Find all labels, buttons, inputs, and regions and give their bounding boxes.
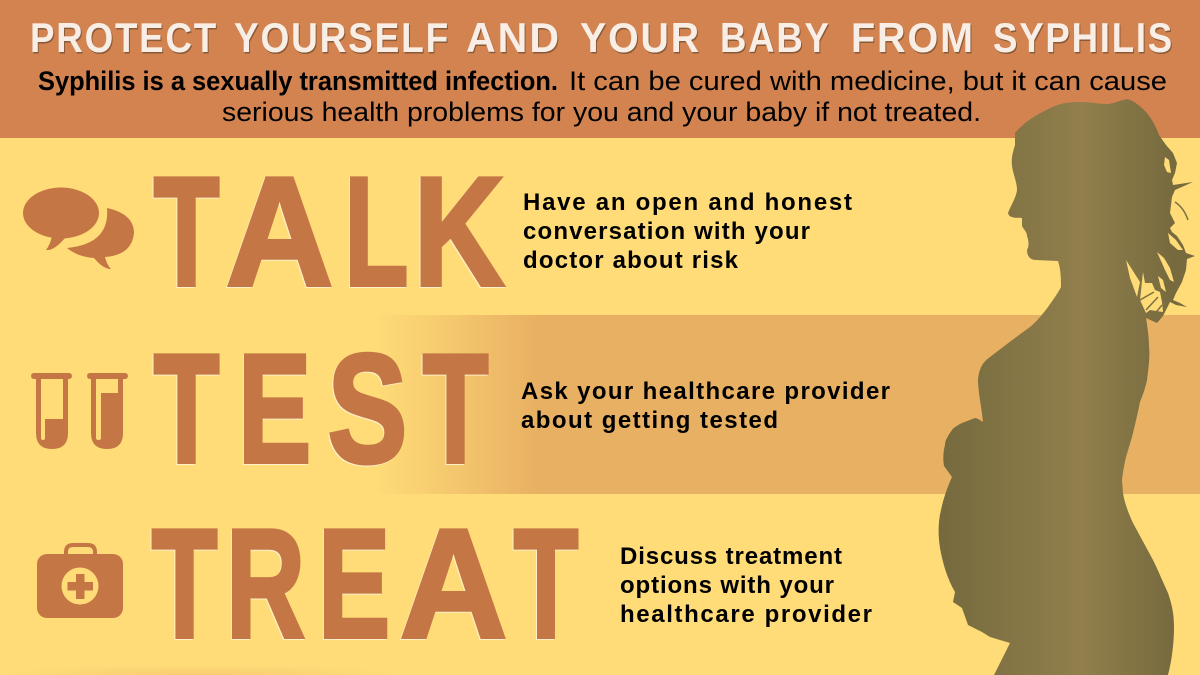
- heading: TREAT: T: [513, 498, 577, 671]
- TREAT row: [37, 497, 872, 671]
- title: YOURSELF: [235, 16, 451, 62]
- description: talk: conversation with your: [523, 218, 810, 245]
- heading: TREAT: E: [317, 498, 389, 671]
- TALK row: [23, 145, 852, 319]
- title: PROTECT: [30, 14, 218, 61]
- bottom edge shading: [0, 655, 400, 675]
- heading: TREAT: A: [400, 497, 507, 670]
- title: YOURSELF: [234, 14, 450, 61]
- heading: TREAT: T: [514, 497, 578, 670]
- heading: TEST: E: [237, 323, 310, 496]
- TEST row: [31, 322, 890, 496]
- icon: speech bubbles: [23, 188, 134, 269]
- description: treat: [620, 543, 872, 628]
- title: YOUR: [580, 14, 701, 61]
- heading: TEST: T: [423, 322, 488, 495]
- heading: TREAT: A: [399, 498, 506, 671]
- heading: TALK: T: [154, 145, 219, 318]
- intro text: serious health problems for you and your baby if not treated.: [222, 97, 981, 127]
- heading: TREAT: T: [152, 497, 217, 670]
- heading: TALK: A: [225, 146, 332, 319]
- heading: TEST: E: [238, 322, 311, 495]
- title: BABY: [721, 16, 831, 62]
- description: treat: Discuss treatment: [620, 543, 842, 570]
- title: BABY: [720, 14, 830, 61]
- heading: TEST: T: [153, 323, 218, 496]
- heading: TEST: T: [154, 322, 219, 495]
- heading: TREAT: R: [226, 497, 305, 670]
- heading: TALK: L: [344, 145, 408, 318]
- title: FROM: [852, 16, 976, 62]
- description: talk: Have an open and honest: [523, 189, 852, 216]
- icon: medical kit: [37, 545, 123, 618]
- icon: test tubes: [31, 373, 128, 449]
- title: SYPHILIS: [994, 16, 1175, 62]
- description: treat: options with your: [620, 572, 834, 599]
- description: test: about getting tested: [521, 407, 778, 434]
- description: talk: [523, 189, 852, 274]
- heading: TREAT: [151, 497, 578, 671]
- title: FROM: [851, 14, 975, 61]
- heading: TALK: K: [414, 145, 504, 318]
- description: test: Ask your healthcare provider: [521, 378, 890, 405]
- test band: [375, 315, 1200, 494]
- heading: TALK: L: [343, 146, 407, 319]
- heading: TREAT: E: [318, 497, 390, 670]
- heading: TALK: A: [226, 145, 333, 318]
- description: test: [521, 378, 890, 434]
- heading: TALK: T: [153, 146, 218, 319]
- heading: TREAT: T: [151, 498, 216, 671]
- heading: TEST: [153, 322, 488, 496]
- title: [30, 14, 1175, 62]
- heading: TEST: T: [422, 323, 487, 496]
- title: PROTECT: [31, 16, 219, 62]
- description: talk: doctor about risk: [523, 247, 739, 274]
- intro text: Syphilis is a sexually transmitted infection.: [38, 66, 558, 96]
- description: treat: healthcare provider: [620, 601, 872, 628]
- intro text: [38, 66, 1167, 127]
- heading: TALK: [153, 145, 504, 319]
- title: AND: [466, 14, 561, 61]
- title: SYPHILIS: [993, 14, 1174, 61]
- intro text: It can be cured with medicine, but it can cause: [569, 66, 1167, 96]
- silhouette of pregnant woman: [939, 99, 1195, 675]
- title: AND: [467, 16, 562, 62]
- heading: TALK: K: [413, 146, 503, 319]
- heading: TEST: S: [327, 323, 406, 496]
- title: YOUR: [581, 16, 702, 62]
- heading: TEST: S: [328, 322, 407, 495]
- header band: [0, 0, 1200, 138]
- heading: TREAT: R: [225, 498, 304, 671]
